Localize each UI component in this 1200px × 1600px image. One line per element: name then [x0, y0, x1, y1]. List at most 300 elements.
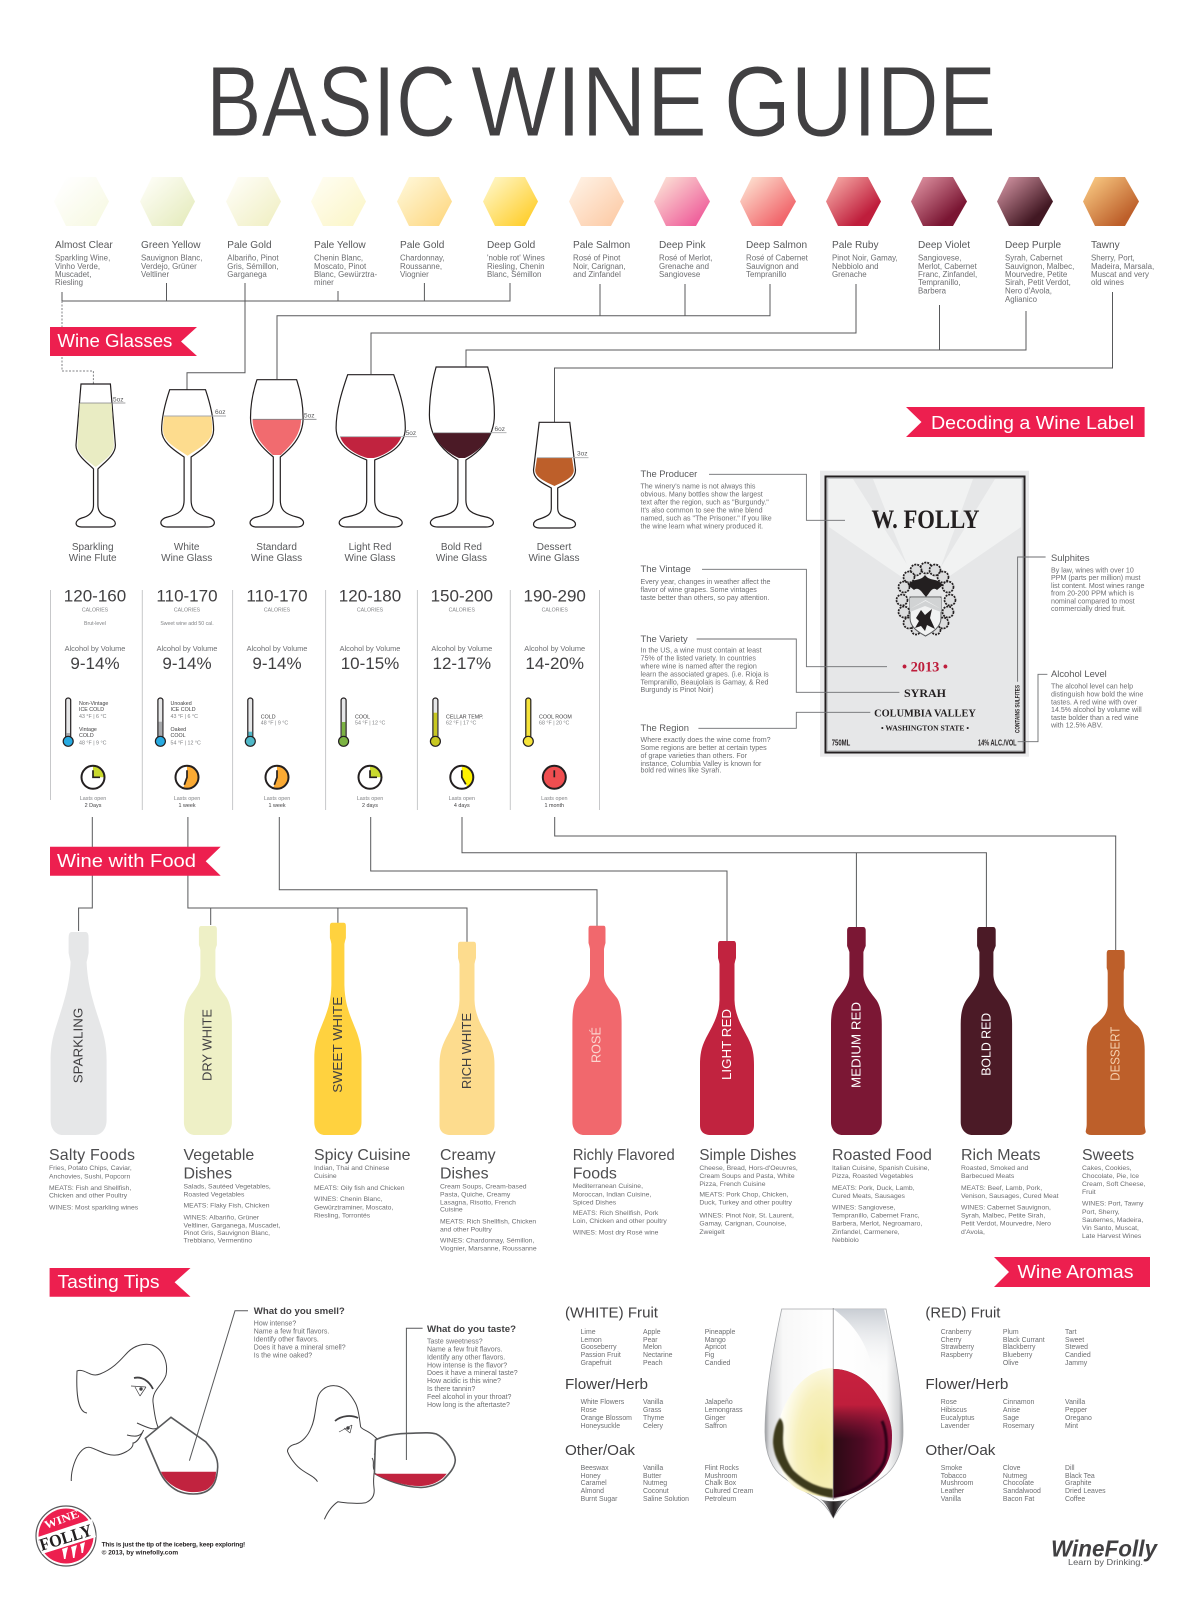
varieties: pale ruby: Nebbiolo and	[832, 262, 879, 271]
callout: the vintage: taste better than others, so pay attention.	[640, 594, 769, 602]
column: dessert stats	[524, 586, 586, 673]
clock: light red 2 days: 2 days	[362, 803, 378, 809]
tilted glass	[145, 1417, 218, 1494]
list: white fruit: Lemon	[581, 1337, 602, 1344]
pairing: roasted food: Nebbiolo	[832, 1237, 859, 1244]
leader line	[189, 1311, 248, 1461]
list: red other oak: Mushroom	[941, 1480, 974, 1487]
serving temperatures	[63, 698, 572, 747]
name: bold red: Wine Glass	[436, 553, 487, 564]
callout: the variety: In the US, a wine must contain at least	[640, 647, 762, 655]
heading: red flower herb: Flower/Herb	[925, 1376, 1008, 1393]
pairing: sweets: Sweets	[1082, 1147, 1134, 1164]
list: red other oak: Dried Leaves	[1065, 1488, 1106, 1495]
thermometer: bold red	[430, 698, 484, 746]
thermometer: white: ICE COLD	[170, 707, 196, 713]
list: red flower herb: Mint	[1065, 1423, 1078, 1430]
pairing: roasted food: Cured Meats, Sausages	[832, 1193, 906, 1200]
bottle: sparkling	[51, 932, 107, 1135]
callout: the variety	[640, 633, 769, 694]
pairing: vegetable dishes: Roasted Vegetables	[184, 1192, 245, 1199]
list: white other oak: Beeswax	[581, 1465, 609, 1472]
bottle: medium red: MEDIUM RED	[848, 1002, 863, 1088]
crest	[896, 562, 956, 636]
clock: bold red 4 days	[449, 766, 475, 809]
pairing: sweets: Cream, Soft Cheese,	[1082, 1181, 1146, 1188]
white wine half	[776, 1368, 833, 1497]
pairing: sweets: Fruit	[1082, 1189, 1096, 1196]
wine label leader lines	[697, 474, 1047, 742]
wine colour labels	[55, 240, 1154, 304]
callout: the variety: Tempranillo, Beaujolais is Gamay, & Red	[640, 679, 769, 687]
column: white stats: 9-14%	[162, 654, 212, 673]
column: bold red stats: 12-17%	[432, 654, 491, 673]
varieties: pale yellow: miner	[314, 278, 334, 287]
pairing: creamy dishes: Creamy	[440, 1147, 496, 1164]
wine colour swatches	[54, 177, 1139, 226]
column: standard stats: CALORIES	[264, 608, 291, 614]
column: sparkling stats: Alcohol by Volume	[65, 644, 125, 653]
label: pale gold: Pale Gold	[227, 240, 272, 251]
connector lines: glasses to bottles	[79, 817, 1116, 950]
hexagon: deep purple	[997, 177, 1053, 226]
label: pale salmon: Pale Salmon	[573, 240, 630, 251]
taste questions: Is there tannin?	[427, 1386, 475, 1393]
varieties: tawny: Madeira, Marsala,	[1091, 262, 1154, 271]
callout: the vintage	[640, 563, 771, 602]
clock: white 1 week: 1 week	[178, 803, 196, 809]
how long it lasts open	[80, 766, 567, 809]
hexagon: pale salmon	[569, 177, 624, 226]
list: red fruit: Cranberry	[941, 1329, 972, 1336]
list: red flower herb: Hibiscus	[941, 1407, 967, 1414]
contains sulfites: CONTAINS SULFITES	[1016, 685, 1022, 733]
varieties: almost clear: Sparkling Wine,	[55, 254, 110, 262]
list: white other oak: Caramel	[581, 1480, 607, 1487]
callout: alcohol level: Alcohol Level	[1051, 668, 1107, 679]
pairing: roasted food	[832, 1147, 932, 1244]
list: white fruit: Apple	[643, 1329, 661, 1336]
smell questions: What do you smell?	[254, 1306, 345, 1316]
title: WINE	[471, 46, 707, 158]
pairing: creamy dishes: Lasagna, Risotto, French	[440, 1200, 516, 1207]
wine folly round logo	[36, 1506, 96, 1566]
column: sparkling stats: Brut-level	[84, 621, 106, 627]
red wine half	[833, 1369, 892, 1497]
smell questions	[254, 1306, 346, 1360]
pairing: vegetable dishes: WINES: Albariño, Grüner	[184, 1214, 260, 1221]
label face	[826, 476, 1024, 752]
callout: the variety: 75% of the listed variety. In countries	[640, 655, 756, 663]
column dividers	[50, 590, 600, 810]
varieties: deep purple: Syrah, Cabernet	[1005, 254, 1063, 262]
list: white other oak: Flint Rocks	[705, 1465, 739, 1472]
callout: the variety: The Variety	[640, 633, 688, 644]
thermometer: white: COOL	[170, 733, 186, 739]
label: deep violet: Deep Violet	[918, 240, 970, 251]
horizontal glass	[374, 1433, 455, 1487]
pairing: rich meats: MEATS: Beef, Lamb, Pork,	[961, 1185, 1042, 1192]
varieties: deep purple: Nero d'Avola,	[1005, 287, 1052, 296]
varieties: deep violet: Merlot, Cabernet	[918, 262, 978, 271]
title: BASIC	[206, 46, 456, 158]
region: COLUMBIA VALLEY	[874, 708, 976, 720]
varieties: tawny: Muscat and very	[1091, 270, 1149, 279]
callout: the vintage: flavor of wine grapes. Some vintages	[640, 586, 757, 594]
list: red flower herb: Pepper	[1065, 1407, 1088, 1414]
list: white fruit: Pear	[643, 1337, 658, 1344]
clock: sparkling 2 days: 2 Days	[85, 803, 102, 809]
list: white flower herb: Honeysuckle	[581, 1423, 620, 1430]
list: white other oak: Saline Solution	[643, 1496, 689, 1503]
bottle: medium red	[831, 927, 882, 1135]
list: red flower herb: Rosemary	[1003, 1423, 1035, 1430]
callout: sulphites: By law, wines with over 10	[1051, 567, 1134, 575]
bottle: bold red: BOLD RED	[978, 1013, 993, 1076]
list: white other oak: Coconut	[643, 1488, 669, 1495]
column: dessert stats: Alcohol by Volume	[524, 644, 585, 653]
pairing: rich meats: Petit Verdot, Mourvedre, Nero	[961, 1221, 1051, 1228]
callout: sulphites: nominal compared to most	[1051, 598, 1135, 606]
label: deep salmon: Deep Salmon	[746, 240, 807, 251]
varieties: pale ruby: Grenache	[832, 270, 867, 279]
wine glasses	[76, 367, 588, 528]
thermometer: light red	[339, 698, 386, 746]
horizontal glass wine	[374, 1474, 447, 1486]
hexagon: tawny	[1083, 177, 1139, 226]
clock: standard 1 week: 1 week	[268, 803, 286, 809]
list: white flower herb: Jalapeño	[705, 1399, 733, 1406]
thermometer: light red: COOL	[355, 715, 370, 721]
list: red fruit: Cherry	[941, 1337, 962, 1344]
list: red flower herb: Lavender	[941, 1423, 970, 1430]
list: white fruit: Peach	[643, 1360, 663, 1367]
clock: standard 1 week	[264, 766, 290, 809]
glass bowl	[765, 1309, 903, 1518]
glass: bold red	[429, 367, 506, 527]
pairing: rich meats: Venison, Sausages, Cured Meat	[961, 1193, 1059, 1200]
pairing: vegetable dishes: Salads, Sautéed Vegetables,	[184, 1183, 271, 1190]
list: red fruit: Sweet	[1065, 1337, 1084, 1344]
list: red other oak: Chocolate	[1003, 1480, 1034, 1487]
list: red other oak: Clove	[1003, 1465, 1021, 1472]
pairing: vegetable dishes	[184, 1147, 280, 1245]
list: white fruit: Mango	[705, 1337, 726, 1344]
column: dessert stats: CALORIES	[542, 608, 568, 614]
list: white flower herb: Orange Blossom	[581, 1415, 632, 1422]
column: white stats: Alcohol by Volume	[157, 644, 217, 653]
list: red flower herb: Eucalyptus	[941, 1415, 975, 1422]
aromas: red wine	[925, 1305, 1106, 1503]
pairing: sweets: WINES: Port, Tawny	[1082, 1201, 1144, 1208]
bottle: rose: ROSÉ	[588, 1027, 604, 1063]
varieties: deep purple: Sauvignon, Malbec,	[1005, 262, 1074, 271]
list: red fruit: Raspberry	[941, 1352, 973, 1359]
varieties: pale gold: Viognier	[400, 270, 429, 279]
list: white other oak: Honey	[581, 1473, 601, 1480]
list: white flower herb: Celery	[643, 1423, 663, 1430]
list: red fruit: Olive	[1003, 1360, 1019, 1367]
varieties: pale yellow: Moscato, Pinot	[314, 262, 367, 271]
white wine edge	[773, 1418, 833, 1498]
base tip	[820, 1499, 847, 1518]
pairing: vegetable dishes: Pinot Gris, Sauvignon Blanc,	[184, 1230, 270, 1237]
pairing: roasted food: Barbera, Merlot, Negroamaro,	[832, 1221, 922, 1228]
list: white other oak: Petroleum	[705, 1496, 736, 1503]
label: deep purple: Deep Purple	[1005, 240, 1061, 251]
vintage: • 2013 •	[902, 660, 948, 676]
name: white: White	[174, 542, 200, 553]
pairing: salty foods: Fries, Potato Chips, Caviar,	[49, 1165, 132, 1172]
varieties: deep salmon: Tempranillo	[746, 270, 787, 279]
tasting: taste illustration	[288, 1324, 518, 1519]
clock: white 1 week: Lasts open	[174, 796, 200, 802]
smell questions: Is the wine oaked?	[254, 1353, 312, 1360]
callout: alcohol level: taste bolder than a red wine	[1051, 714, 1139, 722]
name: dessert: Wine Glass	[528, 553, 580, 564]
pairing: spicy cuisine	[314, 1147, 411, 1219]
pairing: rich meats: d'Avola,	[961, 1229, 985, 1236]
centre divider	[832, 1308, 834, 1500]
name: standard: Standard	[256, 542, 297, 553]
hexagon: deep violet	[911, 177, 967, 226]
column: sparkling stats: 9-14%	[70, 654, 120, 673]
pairing: simple dishes: MEATS: Pork Chop, Chicken,	[699, 1192, 789, 1199]
bottles	[51, 923, 1146, 1135]
hexagon: deep salmon	[740, 177, 796, 226]
clock: light red 2 days: Lasts open	[357, 796, 383, 802]
callout: the vintage: The Vintage	[640, 563, 691, 574]
smell questions: Does it have a mineral smell?	[254, 1345, 346, 1352]
aromas: white wine	[565, 1305, 754, 1503]
column: white stats: 110-170	[156, 586, 218, 606]
pairing: roasted food: Tempranillo, Cabernet Franc,	[832, 1212, 920, 1220]
pairing: salty foods: Chicken and other Poultry	[49, 1193, 128, 1200]
label backing	[820, 471, 1029, 757]
list: white flower herb: Ginger	[705, 1415, 726, 1422]
pairing: creamy dishes: Cuisine	[440, 1207, 463, 1214]
varieties: deep pink: Sangiovese	[659, 270, 701, 279]
footer note: © 2013, by winefolly.com	[102, 1549, 178, 1557]
callout: the variety: learn the associated grapes. (i.e. Rioja is	[640, 671, 769, 679]
varieties: pale salmon: Rosé of Pinot	[573, 254, 621, 262]
list: white fruit: Passion Fruit	[581, 1352, 621, 1359]
taste questions: Taste sweetness?	[427, 1339, 483, 1346]
tasting: smell illustration	[71, 1306, 346, 1494]
pairing: creamy dishes: Dishes	[440, 1165, 489, 1182]
thermometer: sparkling: Non-Vintage	[79, 701, 108, 707]
pairing: simple dishes: Cream Soups and Pasta, White	[699, 1173, 795, 1180]
thermometer: sparkling	[63, 698, 108, 747]
banner: wine with food: Wine with Food	[57, 850, 196, 871]
column: light red stats: CALORIES	[357, 608, 384, 614]
callout: the vintage: Every year, changes in weather affect the	[640, 578, 771, 586]
thermometer: white: Oaked	[170, 727, 186, 733]
column: light red stats	[339, 586, 401, 673]
callout: the producer: text after the region, such as "Burgundy."	[640, 498, 769, 506]
heading: red other oak: Other/Oak	[925, 1442, 996, 1459]
list: white fruit: Apricot	[705, 1344, 726, 1351]
column: white stats: Sweet wine add 50 cal.	[160, 621, 214, 627]
pairing: rich meats: WINES: Cabernet Sauvignon,	[961, 1204, 1051, 1211]
pairing: simple dishes	[699, 1147, 798, 1236]
face profile smelling	[71, 1344, 167, 1481]
varieties: pale salmon: and Zinfandel	[573, 270, 621, 279]
banner: decoding a wine label: Decoding a Wine Label	[931, 412, 1134, 433]
clock: bold red 4 days: Lasts open	[449, 796, 475, 802]
taste questions: Identify any other flavors.	[427, 1355, 505, 1362]
column: bold red stats: Alcohol by Volume	[431, 644, 492, 653]
varieties: almost clear: Vinho Verde,	[55, 262, 100, 271]
pairing: salty foods: MEATS: Fish and Shellfish,	[49, 1185, 131, 1192]
varieties: green yellow: Verdejo, Grüner	[141, 262, 197, 271]
label: deep pink: Deep Pink	[659, 240, 707, 251]
list: red fruit: Black Currant	[1003, 1337, 1045, 1344]
thermometer: white: Unoaked	[170, 701, 192, 707]
hexagon: green yellow	[140, 177, 195, 226]
pairing: sweets: Cakes, Cookies,	[1082, 1165, 1132, 1172]
list: white other oak: Almond	[581, 1488, 604, 1495]
pairing: roasted food: Italian Cuisine, Spanish Cuisine,	[832, 1165, 930, 1172]
banner: tasting tips: Tasting Tips	[58, 1271, 160, 1292]
list: white fruit: Candied	[705, 1360, 731, 1367]
list: red fruit: Jammy	[1065, 1360, 1088, 1367]
pairing: roasted food: Zinfandel, Carmenere,	[832, 1229, 900, 1236]
callout: sulphites: from 20-200 PPM which is	[1051, 590, 1134, 598]
pairing: roasted food: Pizza, Roasted Vegetables	[832, 1173, 914, 1180]
list: red fruit: Tart	[1065, 1329, 1077, 1336]
glass: dessert	[534, 422, 588, 528]
pairing: creamy dishes: Cream Soups, Cream-based	[440, 1183, 527, 1190]
callout: the region	[640, 722, 771, 775]
column: white stats: CALORIES	[174, 608, 201, 614]
varieties: pale yellow: Chenin Blanc,	[314, 254, 363, 262]
column: standard stats: 9-14%	[252, 654, 302, 673]
list: red flower herb: Vanilla	[1065, 1399, 1085, 1406]
name: sparkling: Sparkling	[72, 542, 114, 553]
bottle: light red: LIGHT RED	[719, 1009, 734, 1080]
wine label callout text	[640, 468, 1144, 775]
callout: sulphites: commercially dried fruit.	[1051, 605, 1126, 613]
glass: sparkling flute: 5oz	[113, 396, 123, 404]
callout: sulphites: PPM (parts per million) must	[1051, 574, 1141, 582]
pairing: vegetable dishes: Trebbiano, Vermentino	[184, 1238, 252, 1245]
variety: SYRAH	[904, 686, 947, 700]
list: red other oak: Bacon Fat	[1003, 1496, 1034, 1503]
pairing: creamy dishes: WINES: Chardonnay, Sémillon,	[440, 1237, 534, 1244]
bottle: bold red	[961, 927, 1012, 1135]
callout: alcohol level: 14.5% alcohol by volume will	[1051, 706, 1142, 714]
label: deep gold: Deep Gold	[487, 240, 535, 251]
glass: sparkling flute	[76, 384, 125, 527]
pairing: salty foods: Salty Foods	[49, 1147, 135, 1164]
pairing: vegetable dishes: Dishes	[184, 1165, 232, 1182]
pairing: roasted food: MEATS: Pork, Duck, Lamb,	[832, 1185, 915, 1192]
pairing: richly flavored foods: WINES: Most dry Rosé wine	[573, 1230, 659, 1237]
banner: wine aromas: Wine Aromas	[1018, 1261, 1134, 1282]
label: pale yellow: Pale Yellow	[314, 240, 366, 251]
glass: light red: 5oz	[406, 430, 416, 437]
pairing: richly flavored foods: Spiced Dishes	[573, 1200, 617, 1207]
list: red fruit: Strawberry	[941, 1344, 975, 1351]
thermometer: standard: 48 °F | 9 °C	[261, 720, 288, 726]
pairing: sweets: Sauternes, Madeira,	[1082, 1217, 1143, 1224]
list: white other oak: Nutmeg	[643, 1480, 667, 1487]
list: white fruit: Pineapple	[705, 1329, 736, 1336]
list: red flower herb: Anise	[1003, 1407, 1020, 1414]
list: white other oak: Chalk Box	[705, 1480, 737, 1487]
callout: the producer: The Producer	[640, 468, 697, 479]
bottle: sparkling: SPARKLING	[71, 1008, 86, 1083]
clock: dessert 1 month	[541, 766, 567, 809]
list: red other oak: Tobacco	[941, 1473, 967, 1480]
pairing: simple dishes: Gamay, Carignan, Counoise,	[699, 1221, 787, 1228]
hexagon: pale gold	[226, 177, 281, 226]
callout: alcohol level: distinguish how bold the wine	[1051, 691, 1143, 699]
column: white stats	[156, 586, 218, 673]
list: red flower herb: Rose	[941, 1399, 957, 1406]
column: dessert stats: 190-290	[524, 586, 586, 606]
thermometer: sparkling: COLD	[79, 733, 94, 739]
pairing: simple dishes: Pizza, French Cuisine	[699, 1181, 766, 1188]
eye and brow	[335, 1416, 358, 1433]
list: red fruit: Plum	[1003, 1329, 1019, 1336]
thermometer: sparkling: 43 °F | 6 °C	[79, 714, 107, 720]
column: bold red stats	[431, 586, 493, 673]
name: white: Wine Glass	[161, 553, 212, 564]
taste questions: Does it have a mineral taste?	[427, 1370, 518, 1377]
clock: standard 1 week: Lasts open	[264, 796, 290, 802]
taste questions	[427, 1324, 518, 1409]
clock: bold red 4 days: 4 days	[454, 803, 470, 809]
varieties: deep gold: Blanc, Sémillon	[487, 270, 541, 279]
pairing: simple dishes: Zweigelt	[699, 1229, 725, 1236]
thermometer: white	[155, 698, 201, 747]
pairing: sweets: Vin Santo, Muscat,	[1082, 1225, 1139, 1232]
clock: dessert 1 month: Lasts open	[541, 796, 567, 802]
glass reflection	[834, 1309, 895, 1375]
title: GUIDE	[724, 46, 996, 158]
list: white fruit: Lime	[581, 1329, 596, 1336]
pairing: simple dishes: Cheese, Bread, Hors-d'Oeuvres,	[699, 1165, 798, 1172]
varieties: tawny: Sherry, Port,	[1091, 254, 1135, 262]
column: sparkling stats: 120-160	[64, 586, 126, 606]
thermometer: standard	[245, 698, 288, 746]
heading: white fruit: (WHITE) Fruit	[565, 1305, 659, 1322]
pairing: roasted food: WINES: Sangiovese,	[832, 1204, 896, 1211]
varieties: green yellow: Sauvignon Blanc,	[141, 254, 202, 262]
aroma glass illustration	[765, 1308, 903, 1518]
pairing: creamy dishes	[440, 1147, 537, 1252]
clock: light red 2 days	[357, 766, 383, 809]
label: pale gold: Pale Gold	[400, 240, 444, 251]
thermometer: light red: 54 °F | 12 °C	[355, 720, 386, 726]
name: light red: Wine Glass	[344, 553, 396, 564]
list: red other oak: Dill	[1065, 1465, 1075, 1472]
callout: alcohol level: tastes. A red wine with over	[1051, 699, 1138, 707]
varieties: pale gold: Albariño, Pinot	[227, 254, 279, 262]
pairing: salty foods	[49, 1147, 139, 1211]
column: sparkling stats: CALORIES	[82, 608, 109, 614]
taste questions: Feel alcohol in your throat?	[427, 1394, 512, 1401]
list: white fruit: Gooseberry	[581, 1344, 617, 1351]
banner: wine aromas	[994, 1257, 1150, 1287]
list: white fruit: Melon	[643, 1344, 662, 1351]
banner: wine glasses	[50, 327, 197, 356]
varieties: pale yellow: Blanc, Gewürztra-	[314, 270, 378, 279]
glass: bold red: 6oz	[494, 426, 505, 433]
varieties: pale gold: Garganega	[227, 270, 267, 279]
